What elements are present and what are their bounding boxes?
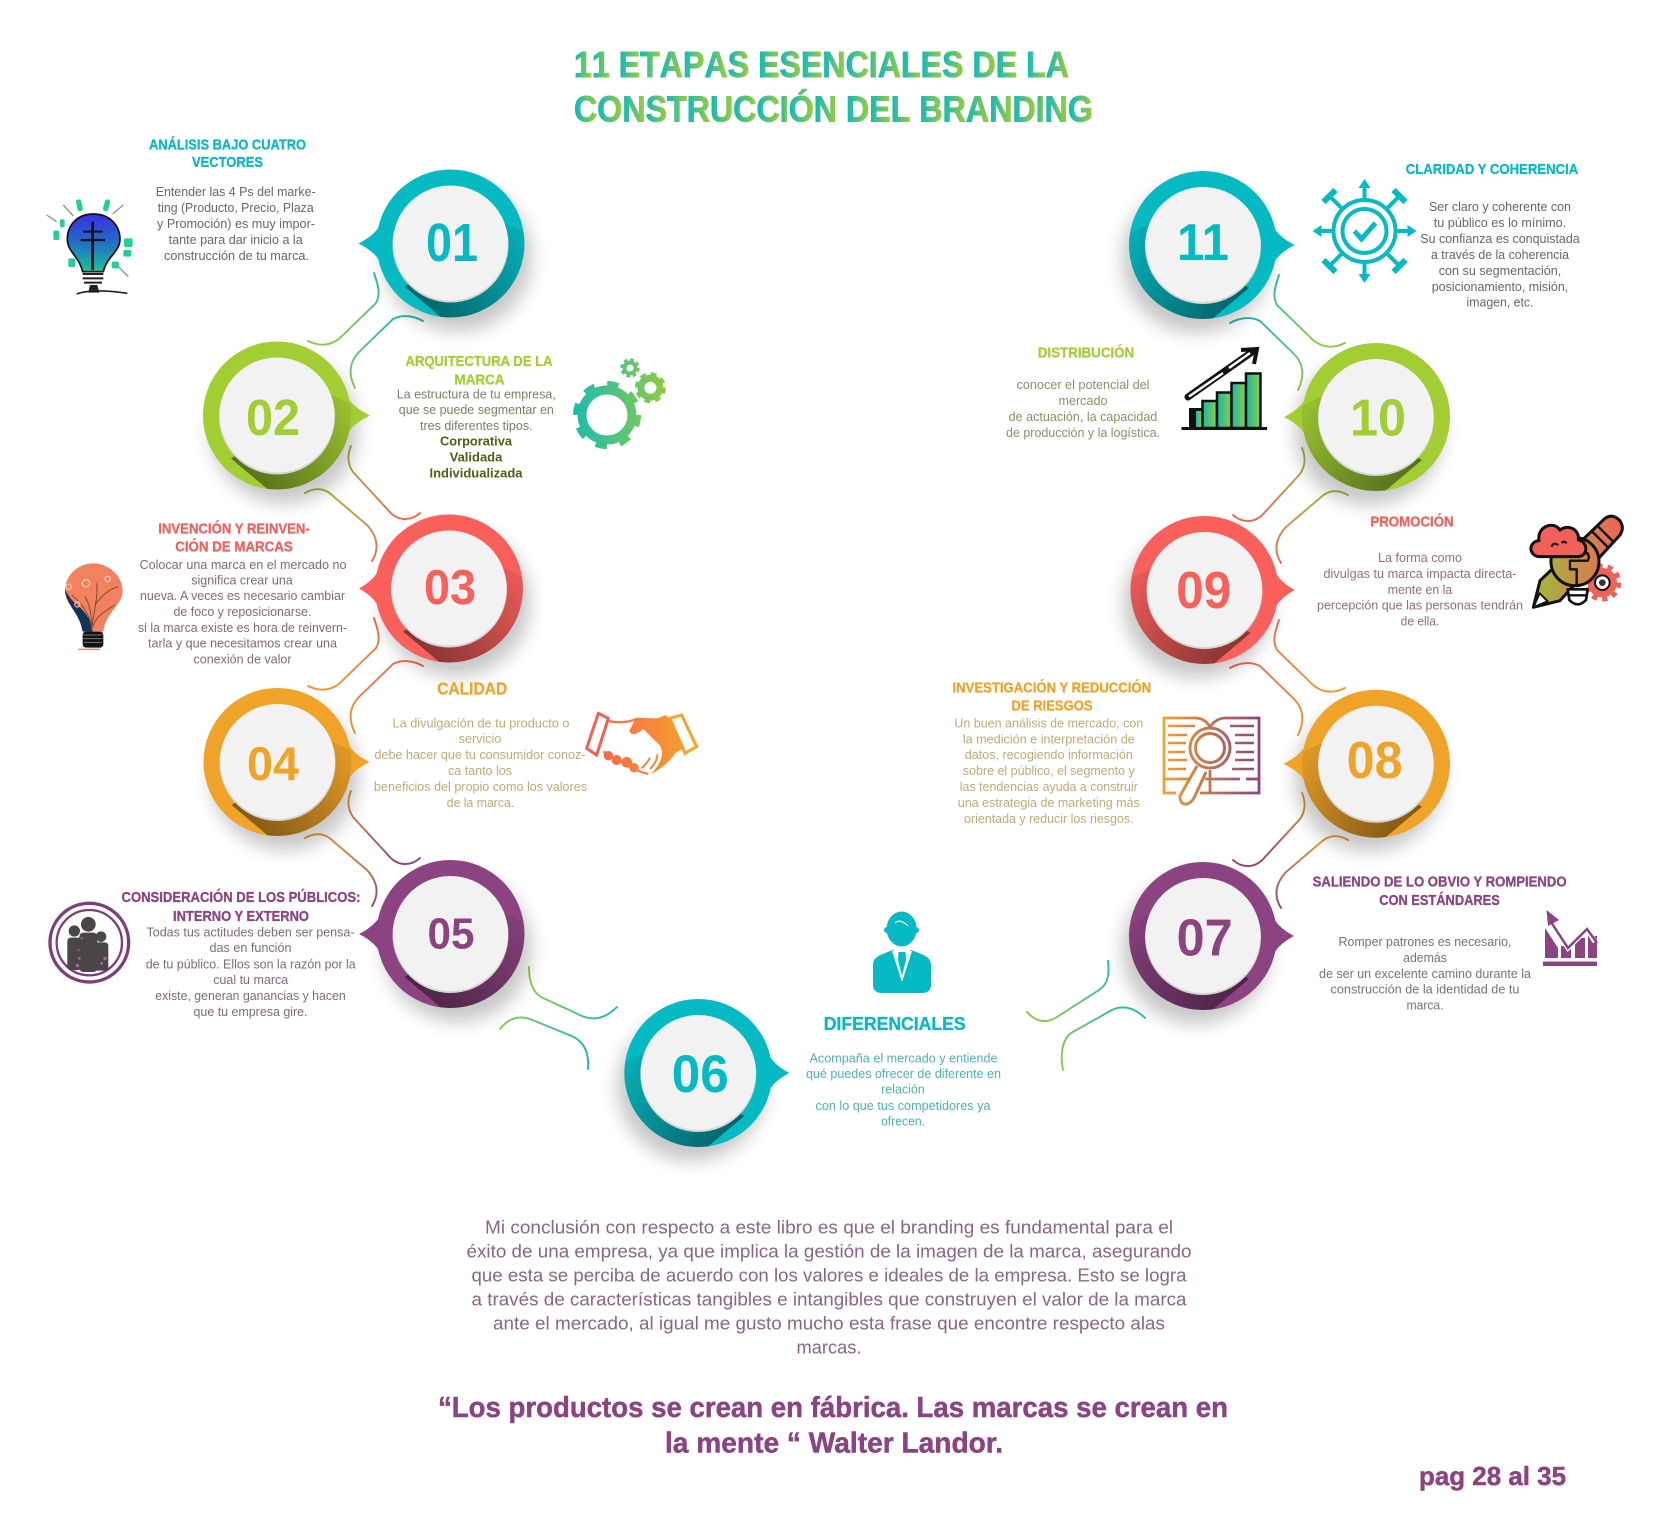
icon: handshake xyxy=(587,713,697,774)
body 11: imagen, etc. xyxy=(1466,296,1534,310)
body 09: percepción que las personas tendrán xyxy=(1317,599,1523,613)
body 05: existe, generan ganancias y hacen xyxy=(155,989,346,1003)
body 11: tu público es lo mínimo. xyxy=(1434,216,1566,230)
body 03: significa crear una xyxy=(191,573,293,587)
step badge 05: 05 xyxy=(428,910,474,958)
step badge 02 xyxy=(203,342,370,506)
body 08: sobre el público, el segmento y xyxy=(963,764,1136,778)
heading 11: CLARIDAD Y COHERENCIA xyxy=(1406,162,1579,178)
heading 07: CON ESTÁNDARES xyxy=(1379,892,1500,909)
step badge 07: 07 xyxy=(1177,910,1233,968)
body 04: La divulgación de tu producto o xyxy=(392,716,570,730)
body 01: Entender las 4 Ps del marke- xyxy=(156,185,316,199)
icon: orange tree bulb xyxy=(65,563,123,650)
step badge 06: 06 xyxy=(672,1045,729,1104)
heading 10: DISTRIBUCIÓN xyxy=(1038,343,1134,361)
body 05: de tu público. Ellos son la razón por la xyxy=(146,957,356,971)
body 02: que se puede segmentar en xyxy=(399,403,554,417)
connectors: right column xyxy=(1230,275,1348,908)
body 06: relación xyxy=(881,1082,925,1096)
heading 01 xyxy=(149,136,306,171)
body 02: tres diferentes tipos. xyxy=(420,419,533,433)
step badge 09: 09 xyxy=(1176,562,1231,620)
body 04: beneficios del propio como los valores xyxy=(374,780,587,794)
body 01: construcción de tu marca. xyxy=(164,249,309,263)
heading 08: INVESTIGACIÓN Y REDUCCIÓN xyxy=(952,678,1151,696)
body 04: de la marca. xyxy=(447,796,514,810)
heading 03: INVENCIÓN Y REINVEN- xyxy=(158,519,310,537)
body 07: construcción de la identidad de tu xyxy=(1330,983,1520,997)
panel: step 01 text xyxy=(149,136,316,263)
body 05: cual tu marca xyxy=(213,973,288,987)
heading 02 xyxy=(406,354,553,388)
body 06: con lo que tus competidores ya xyxy=(816,1099,991,1113)
body 06: Acompaña el mercado y entiende xyxy=(810,1051,998,1065)
conclusion paragraph: Mi conclusión con respecto a este libro es que el branding es fundamental para el xyxy=(485,1217,1173,1237)
step badge 09 xyxy=(1120,516,1295,680)
panel: step 06 text xyxy=(806,1013,1001,1129)
step badge 08: 08 xyxy=(1347,732,1403,790)
body 03: nueva. A veces es necesario cambiar xyxy=(140,589,345,603)
heading 06: DIFERENCIALES xyxy=(824,1013,966,1034)
conclusion paragraph: a través de características tangibles e intangibles que construyen el valor de la marca xyxy=(472,1289,1188,1309)
conclusion paragraph: ante el mercado, al igual me gusto mucho esta frase que encontre respecto alas xyxy=(493,1313,1165,1333)
step badge 04: 04 xyxy=(247,737,299,790)
title xyxy=(574,44,1093,130)
body 07: de ser un excelente camino durante la xyxy=(1319,967,1531,981)
body 09: divulgas tu marca impacta directa- xyxy=(1324,567,1516,581)
body 10 xyxy=(1006,378,1160,440)
body 02: Validada xyxy=(450,450,503,464)
icon: businessman xyxy=(873,912,931,993)
body 05: das en función xyxy=(210,941,292,955)
body 04 xyxy=(374,716,587,810)
body 10: de actuación, la capacidad xyxy=(1009,410,1157,424)
body 08: las tendencias ayuda a construir xyxy=(960,780,1138,794)
heading 03: CIÓN DE MARCAS xyxy=(175,538,293,556)
panel: step 02 text xyxy=(397,354,556,480)
panel: step 05 text xyxy=(122,888,360,1019)
body 09: mente en la xyxy=(1388,583,1452,597)
heading 07: SALIENDO DE LO OBVIO Y ROMPIENDO xyxy=(1313,875,1567,891)
quote xyxy=(438,1392,1228,1460)
connectors: around step 06 xyxy=(500,961,1145,1070)
step badge 10: 10 xyxy=(1350,390,1406,448)
body 08: orientada y reducir los riesgos. xyxy=(964,812,1134,826)
step badge 06 xyxy=(613,999,789,1163)
icon: growth bar chart with arrow xyxy=(1182,349,1267,428)
panel: step 10 text xyxy=(1006,343,1160,440)
heading 01: ANÁLISIS BAJO CUATRO xyxy=(149,136,306,154)
body 03: tarla y que necesitamos crear una xyxy=(148,637,337,651)
heading 08: DE RIESGOS xyxy=(1012,698,1093,714)
body 11: Su confianza es conquistada xyxy=(1420,232,1580,246)
heading 02: MARCA xyxy=(454,372,505,388)
body 01: ting (Producto, Precio, Plaza xyxy=(158,201,314,215)
step badge 01: 01 xyxy=(426,213,478,273)
body 03: si la marca existe es hora de reinvern- xyxy=(138,621,347,635)
panel: step 07 text xyxy=(1313,875,1567,1013)
body 10: de producción y la logística. xyxy=(1006,426,1160,440)
body 08: una estrategia de marketing más xyxy=(958,796,1140,810)
body 02: Corporativa xyxy=(440,434,513,448)
body 07: además xyxy=(1403,951,1447,965)
icon: light bulb with cross xyxy=(47,199,133,294)
step badge 03 xyxy=(359,514,534,678)
panel: step 03 text xyxy=(138,519,347,667)
body 03: de foco y reposicionarse. xyxy=(174,605,312,619)
icon: gears xyxy=(577,360,663,445)
heading 01: VECTORES xyxy=(192,155,263,171)
body 04: servicio xyxy=(459,732,501,746)
heading 05: CONSIDERACIÓN DE LOS PÚBLICOS: xyxy=(122,888,360,906)
body 01: tante para dar inicio a la xyxy=(169,233,303,247)
step badge 08 xyxy=(1284,690,1450,854)
body 06: qué puedes ofrecer de diferente en xyxy=(806,1067,1001,1081)
body 11: a través de la coherencia xyxy=(1431,248,1569,262)
body 03 xyxy=(138,558,347,667)
step badge 03: 03 xyxy=(424,561,476,615)
icon: helm wheel with check xyxy=(1312,179,1416,283)
panel: step 04 text xyxy=(374,679,587,810)
step badge 10 xyxy=(1284,343,1450,507)
icon: falling and rising chart xyxy=(1543,910,1597,966)
step badge 01 xyxy=(358,170,536,334)
panel: step 08 text xyxy=(952,678,1151,826)
step badge 07 xyxy=(1118,862,1294,1026)
body 03: conexión de valor xyxy=(194,653,292,667)
heading 08 xyxy=(952,678,1151,714)
body 09 xyxy=(1317,551,1523,629)
heading 07 xyxy=(1313,875,1567,909)
conclusion paragraph xyxy=(466,1217,1192,1357)
page reference: pag 28 al 35 xyxy=(1419,1461,1566,1491)
conclusion paragraph: que esta se perciba de acuerdo con los valores e ideales de la empresa. Esto se logra xyxy=(472,1265,1188,1285)
body 05 xyxy=(146,925,356,1019)
heading 04: CALIDAD xyxy=(437,679,507,699)
body 05: Todas tus actitudes deben ser pensa- xyxy=(146,925,354,939)
body 04: ca tanto los xyxy=(448,764,512,778)
icon: idea bulb with pencil, cloud and gear xyxy=(1531,516,1622,607)
heading 03 xyxy=(158,519,310,556)
body 10: mercado xyxy=(1058,394,1108,408)
body 09: La forma como xyxy=(1378,551,1462,565)
body 08 xyxy=(954,717,1143,826)
body 02: Individualizada xyxy=(430,466,524,480)
body 07: marca. xyxy=(1406,999,1444,1013)
icon: book with magnifier xyxy=(1164,718,1259,804)
body 04: debe hacer que tu consumidor conoz- xyxy=(374,748,586,762)
title: CONSTRUCCIÓN DEL BRANDING xyxy=(574,88,1093,130)
icon: group of people in rings xyxy=(50,903,129,982)
body 01: y Promoción) es muy impor- xyxy=(157,217,315,231)
step badge 11 xyxy=(1118,171,1295,335)
body 11: posicionamiento, misión, xyxy=(1432,280,1568,294)
body 07: Romper patrones es necesario, xyxy=(1338,935,1512,949)
body 02: La estructura de tu empresa, xyxy=(397,387,556,401)
body 05: que tu empresa gire. xyxy=(194,1005,308,1019)
body 06 xyxy=(806,1051,1001,1129)
body 11: con su segmentación, xyxy=(1439,264,1561,278)
connectors: left column xyxy=(305,273,423,906)
body 08: Un buen análisis de mercado, con xyxy=(954,717,1143,731)
conclusion paragraph: éxito de una empresa, ya que implica la gestión de la imagen de la marca, asegurando xyxy=(466,1241,1192,1261)
quote: “Los productos se crean en fábrica. Las marcas se crean en xyxy=(438,1392,1228,1424)
body 01 xyxy=(156,185,316,263)
panel: step 09 text xyxy=(1317,513,1523,629)
body 03: Colocar una marca en el mercado no xyxy=(140,558,347,572)
body 10: conocer el potencial del xyxy=(1016,378,1150,392)
step badge 02: 02 xyxy=(246,389,300,446)
conclusion paragraph: marcas. xyxy=(796,1337,862,1357)
step badge 05 xyxy=(359,860,536,1024)
title: 11 ETAPAS ESENCIALES DE LA xyxy=(574,44,1069,85)
body 08: datos, recogiendo información xyxy=(965,748,1133,762)
quote: la mente “ Walter Landor. xyxy=(665,1428,1003,1460)
body 07 xyxy=(1319,935,1531,1013)
body 11: Ser claro y coherente con xyxy=(1429,200,1571,214)
body 02 xyxy=(397,387,556,480)
body 08: la medición e interpretación de xyxy=(963,732,1135,746)
panel: step 11 text xyxy=(1406,162,1580,310)
heading 02: ARQUITECTURA DE LA xyxy=(406,354,553,370)
heading 05: INTERNO Y EXTERNO xyxy=(173,909,309,925)
body 09: de ella. xyxy=(1401,615,1439,629)
heading 05 xyxy=(122,888,360,925)
heading 09: PROMOCIÓN xyxy=(1370,513,1454,531)
step badge 11: 11 xyxy=(1177,214,1229,272)
body 06: ofrecen. xyxy=(881,1115,925,1129)
body 11 xyxy=(1420,200,1580,310)
step badge 04 xyxy=(204,688,370,852)
